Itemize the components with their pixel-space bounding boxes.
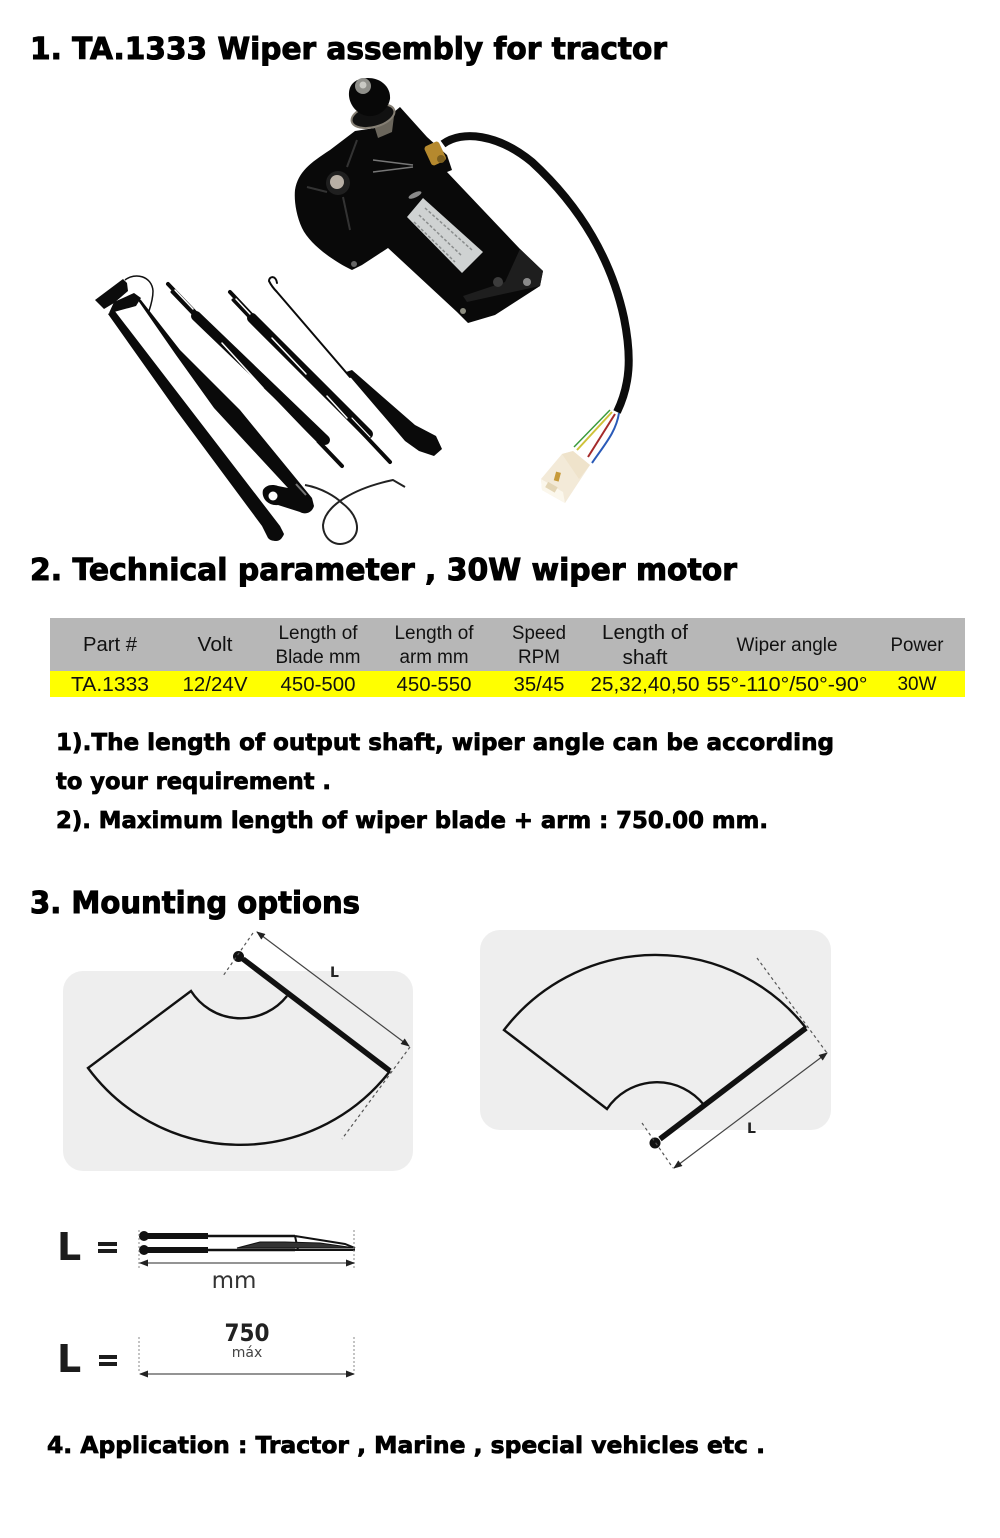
icon: third wiper arm with hook	[269, 277, 442, 456]
table header row: RPM	[518, 647, 560, 668]
text block: notes	[56, 728, 834, 834]
icon: first wiper arm	[95, 276, 284, 541]
formula: L equals 750 max	[57, 1319, 354, 1381]
table header row: Length of	[602, 622, 688, 644]
text block: notes: 1).The length of output shaft, wiper angle can be according	[56, 728, 834, 756]
gearbox centre bolt	[307, 140, 357, 230]
table header row: Blade mm	[276, 647, 360, 668]
dimension L	[223, 932, 410, 1139]
heading: section 4 application: 4. Application : Tractor , Marine , special vehicles etc .	[47, 1431, 765, 1459]
table header row: Length of	[394, 623, 474, 644]
table data row: 450-500	[280, 674, 356, 696]
icon: second wiper blade	[230, 292, 390, 462]
icon: motor cable	[443, 136, 629, 463]
wiper arm	[650, 1028, 806, 1148]
formula: L equals blade plus arm in mm	[57, 1225, 355, 1294]
wiper sweep area	[504, 955, 806, 1109]
icon: second wiper arm	[135, 296, 314, 513]
icon: first wiper blade	[168, 284, 342, 466]
table data row: 30W	[898, 674, 937, 695]
table data row: 450-550	[396, 674, 472, 696]
table header row: Wiper angle	[736, 635, 838, 656]
icon: white connector	[541, 451, 590, 503]
dimension L: L	[330, 965, 339, 981]
panel: mounting option left	[63, 932, 413, 1171]
heading: section 2: 2. Technical parameter , 30W wiper motor	[30, 553, 737, 588]
dimension L: L	[747, 1121, 756, 1137]
icon: arm and blade	[139, 1231, 355, 1255]
table header row: Volt	[198, 634, 233, 656]
table header row: Speed	[512, 623, 566, 644]
table data row: 12/24V	[182, 674, 248, 696]
formula: L equals blade plus arm in mm: mm	[212, 1268, 256, 1294]
wiper sweep area	[88, 991, 390, 1145]
icon: output shaft	[349, 78, 397, 138]
table header row: shaft	[622, 647, 668, 669]
panel: mounting option right	[480, 930, 831, 1168]
table header row: Power	[890, 635, 944, 656]
title: section 1: 1. TA.1333 Wiper assembly for tractor	[30, 32, 667, 67]
motor label	[407, 198, 483, 273]
table data row: 35/45	[514, 674, 564, 696]
table data row: 55°-110°/50°-90°	[706, 674, 868, 696]
wiper arm	[233, 951, 390, 1071]
table data row	[50, 671, 965, 697]
table header row	[50, 618, 965, 671]
formula: L equals 750 max: L	[57, 1337, 81, 1381]
table header row: Length of	[278, 623, 358, 644]
formula: L equals blade plus arm in mm: L	[57, 1225, 81, 1269]
table data row: 25,32,40,50	[590, 674, 700, 696]
table data row: TA.1333	[71, 674, 149, 696]
mounting plate	[460, 249, 543, 314]
text block: notes: 2). Maximum length of wiper blade + arm : 750.00 mm.	[56, 806, 768, 834]
icon: washer hose	[305, 480, 405, 544]
formula: L equals 750 max: máx	[232, 1345, 262, 1361]
icon: motor and gearbox body	[295, 107, 543, 323]
photo: wiper motor and arms kit	[95, 78, 629, 544]
text block: notes: to your requirement .	[56, 767, 331, 795]
dimension L	[642, 958, 827, 1168]
table: technical parameters	[50, 618, 965, 697]
table header row: Part #	[83, 634, 138, 656]
heading: section 3: 3. Mounting options	[30, 886, 360, 921]
icon: cable clamp	[424, 141, 447, 166]
formula: L equals 750 max: 750	[224, 1319, 270, 1347]
table header row: arm mm	[400, 647, 468, 668]
